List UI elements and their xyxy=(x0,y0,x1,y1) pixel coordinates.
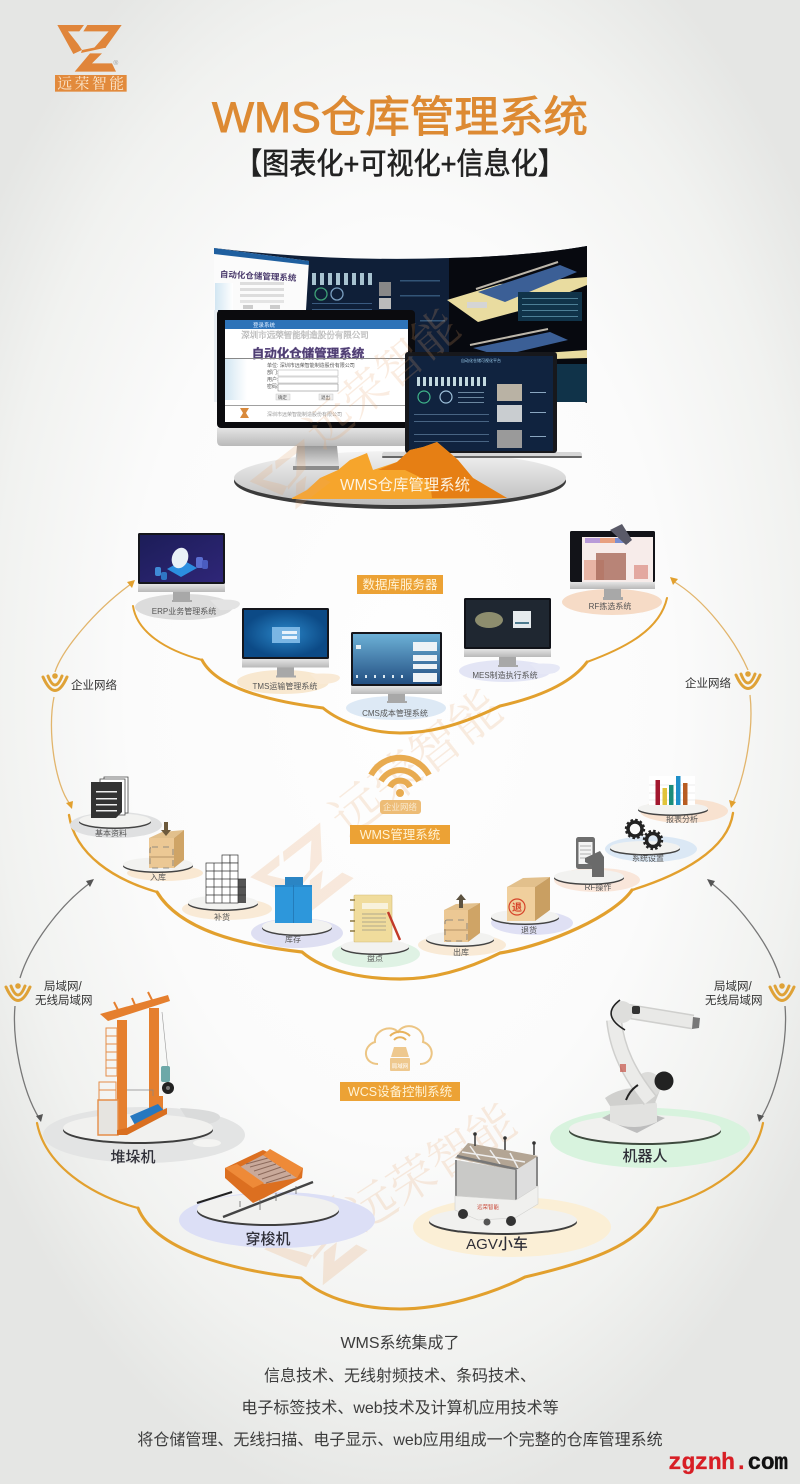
icon and label: enterprise network left xyxy=(43,673,117,692)
item: report analysis: 报表分析 xyxy=(666,814,698,824)
icon: cloud with wifi and LAN box: 局域网 xyxy=(392,1062,409,1070)
orange mountain banner xyxy=(292,442,507,499)
watermark: bottom: 远荣智能 xyxy=(340,1095,526,1241)
platform xyxy=(413,1197,611,1257)
paragraph: 将仓储管理、无线扫描、电子显示、web应用组成一个完整的仓库管理系统 xyxy=(137,1430,663,1449)
desktop monitor: login screen xyxy=(217,310,415,446)
icon and label: LAN right: 局域网/ xyxy=(714,980,752,993)
tag: WMS xyxy=(350,825,450,844)
arrow: left LAN xyxy=(14,879,94,1122)
item: basic data xyxy=(70,777,162,838)
arrow: right LAN xyxy=(707,879,786,1122)
orange mountain banner: WMS仓库管理系统 xyxy=(340,476,470,494)
desktop monitor: login screen: 登录系统 xyxy=(253,321,276,329)
icon and label: enterprise network right: 企业网络 xyxy=(685,676,731,690)
watermark: middle xyxy=(250,679,512,928)
laptop: dashboard xyxy=(382,352,582,458)
tag: WMS: WMS管理系统 xyxy=(360,827,440,842)
icon and label: LAN left: 局域网/ xyxy=(44,980,82,993)
title: WMS仓库管理系统 xyxy=(212,94,588,142)
desktop monitor: login screen: 深圳市远荣智能制造股份有限公司 xyxy=(267,411,342,418)
tag: WCS: WCS设备控制系统 xyxy=(348,1084,452,1099)
station: stacker crane: 堆垛机 xyxy=(110,1149,156,1166)
logo: 远荣智能 xyxy=(57,74,124,92)
item: basic data: 基本资料 xyxy=(95,828,127,838)
desktop monitor: login screen: 确定 xyxy=(278,394,287,401)
laptop: dashboard: 自动化仓储可视化平台 xyxy=(461,357,501,363)
item: stocktaking: 盘点 xyxy=(367,953,383,963)
station: stacker crane xyxy=(43,992,245,1166)
AGV vehicle xyxy=(455,1132,538,1226)
platform xyxy=(43,1107,245,1163)
icon and label: LAN left xyxy=(6,980,92,1007)
station: robot: 机器人 xyxy=(622,1148,668,1165)
paragraph: WMS系统集成了 xyxy=(340,1334,460,1352)
item: returns xyxy=(491,877,573,935)
curved panorama: dashboard panels xyxy=(214,246,587,403)
logo: ® xyxy=(113,59,118,67)
desktop monitor: login screen: 部门: xyxy=(267,369,278,376)
watermark: middle: 远荣智能 xyxy=(320,679,512,847)
tag: database server: 数据库服务器 xyxy=(362,577,438,592)
monitor: RF: RF拣选系统 xyxy=(589,601,631,611)
icon: cloud with wifi and LAN box xyxy=(366,1026,432,1071)
robot arm xyxy=(602,1000,700,1133)
item: stocktaking xyxy=(332,895,420,968)
desktop monitor: login screen: 单位: 深圳市远荣智能制造股份有限公司 xyxy=(267,362,355,369)
cloud outline: WMS xyxy=(69,813,733,979)
paragraph xyxy=(137,1334,663,1449)
item: outbound: 出库 xyxy=(453,947,469,957)
tag: database server xyxy=(357,575,443,594)
monitor: TMS: TMS运输管理系统 xyxy=(253,681,317,691)
desktop monitor: login screen: 自动化仓储管理系统 xyxy=(252,346,365,361)
crane xyxy=(98,992,174,1135)
item: report analysis xyxy=(638,776,728,824)
item: outbound xyxy=(418,894,506,957)
monitor: MES xyxy=(459,598,560,682)
watermark: top: 远荣智能 xyxy=(296,300,469,458)
item: system settings xyxy=(605,820,697,863)
station: shuttle xyxy=(179,1149,375,1248)
site mark: zgznh.com xyxy=(668,1450,788,1476)
item: returns: 退货 xyxy=(521,925,537,935)
cloud outline: database servers xyxy=(133,598,667,733)
logo xyxy=(55,25,127,92)
arrow: left enterprise network xyxy=(51,580,135,809)
icon and label: LAN right: 无线局域网 xyxy=(705,993,762,1007)
icon and label: LAN left: 无线局域网 xyxy=(35,993,92,1007)
item: RF operation xyxy=(554,837,640,892)
icon and label: LAN right xyxy=(705,980,794,1007)
item: RF operation: RF操作 xyxy=(585,882,611,892)
item: inventory: 库存 xyxy=(285,934,301,944)
monitor: TMS xyxy=(237,608,340,694)
item: inventory xyxy=(251,877,343,948)
platform xyxy=(550,1108,750,1168)
monitor: RF xyxy=(562,524,662,615)
monitor: CMS xyxy=(346,632,446,720)
item: inbound xyxy=(123,822,203,882)
platform xyxy=(179,1192,375,1248)
desktop monitor: login screen: 退出 xyxy=(321,394,330,401)
monitor: CMS: CMS成本管理系统 xyxy=(362,708,428,718)
arrow: right enterprise network xyxy=(670,577,751,808)
desktop monitor: login screen: 密码: xyxy=(267,383,278,390)
tag: WCS xyxy=(340,1082,460,1101)
icon and label: enterprise network left: 企业网络 xyxy=(71,678,117,692)
icon: wifi, enterprise network xyxy=(371,758,429,814)
monitor: ERP xyxy=(135,533,240,620)
item: inbound: 入库 xyxy=(150,872,166,882)
station: AGV xyxy=(413,1132,611,1257)
station: AGV: AGV小车 xyxy=(466,1236,528,1253)
item: returns: 退 xyxy=(512,902,522,914)
watermark: bottom xyxy=(264,1095,526,1300)
desktop monitor: login screen: 深圳市远荣智能制造股份有限公司 xyxy=(241,330,369,340)
shuttle vehicle xyxy=(197,1149,313,1217)
monitor: ERP: ERP业务管理系统 xyxy=(152,606,216,616)
hero: WMS screens montage xyxy=(214,246,587,509)
icon and label: enterprise network right xyxy=(685,671,760,690)
station: shuttle: 穿梭机 xyxy=(245,1230,291,1248)
item: system settings: 系统设置 xyxy=(632,853,664,863)
cloud outline: WCS xyxy=(37,1123,763,1309)
item: replenishment xyxy=(182,855,272,922)
AGV vehicle: 远荣智能 xyxy=(477,1203,499,1211)
desktop monitor: login screen: 用户: xyxy=(267,376,278,383)
subtitle: 【图表化+可视化+信息化】 xyxy=(235,148,565,181)
paragraph: 信息技术、无线射频技术、条码技术、 xyxy=(264,1367,536,1385)
curved panorama: dashboard panels: 自动化仓储管理系统 xyxy=(220,269,297,283)
icon: wifi, enterprise network: 企业网络 xyxy=(383,802,417,812)
platform disc xyxy=(234,446,566,509)
panorama: 3D warehouse renders xyxy=(447,262,587,402)
item: replenishment: 补货 xyxy=(214,912,230,922)
station: robot xyxy=(550,1000,750,1168)
monitor: MES: MES制造执行系统 xyxy=(472,670,538,680)
paragraph: 电子标签技术、web技术及计算机应用技术等 xyxy=(241,1398,559,1417)
watermark: top xyxy=(250,300,469,521)
